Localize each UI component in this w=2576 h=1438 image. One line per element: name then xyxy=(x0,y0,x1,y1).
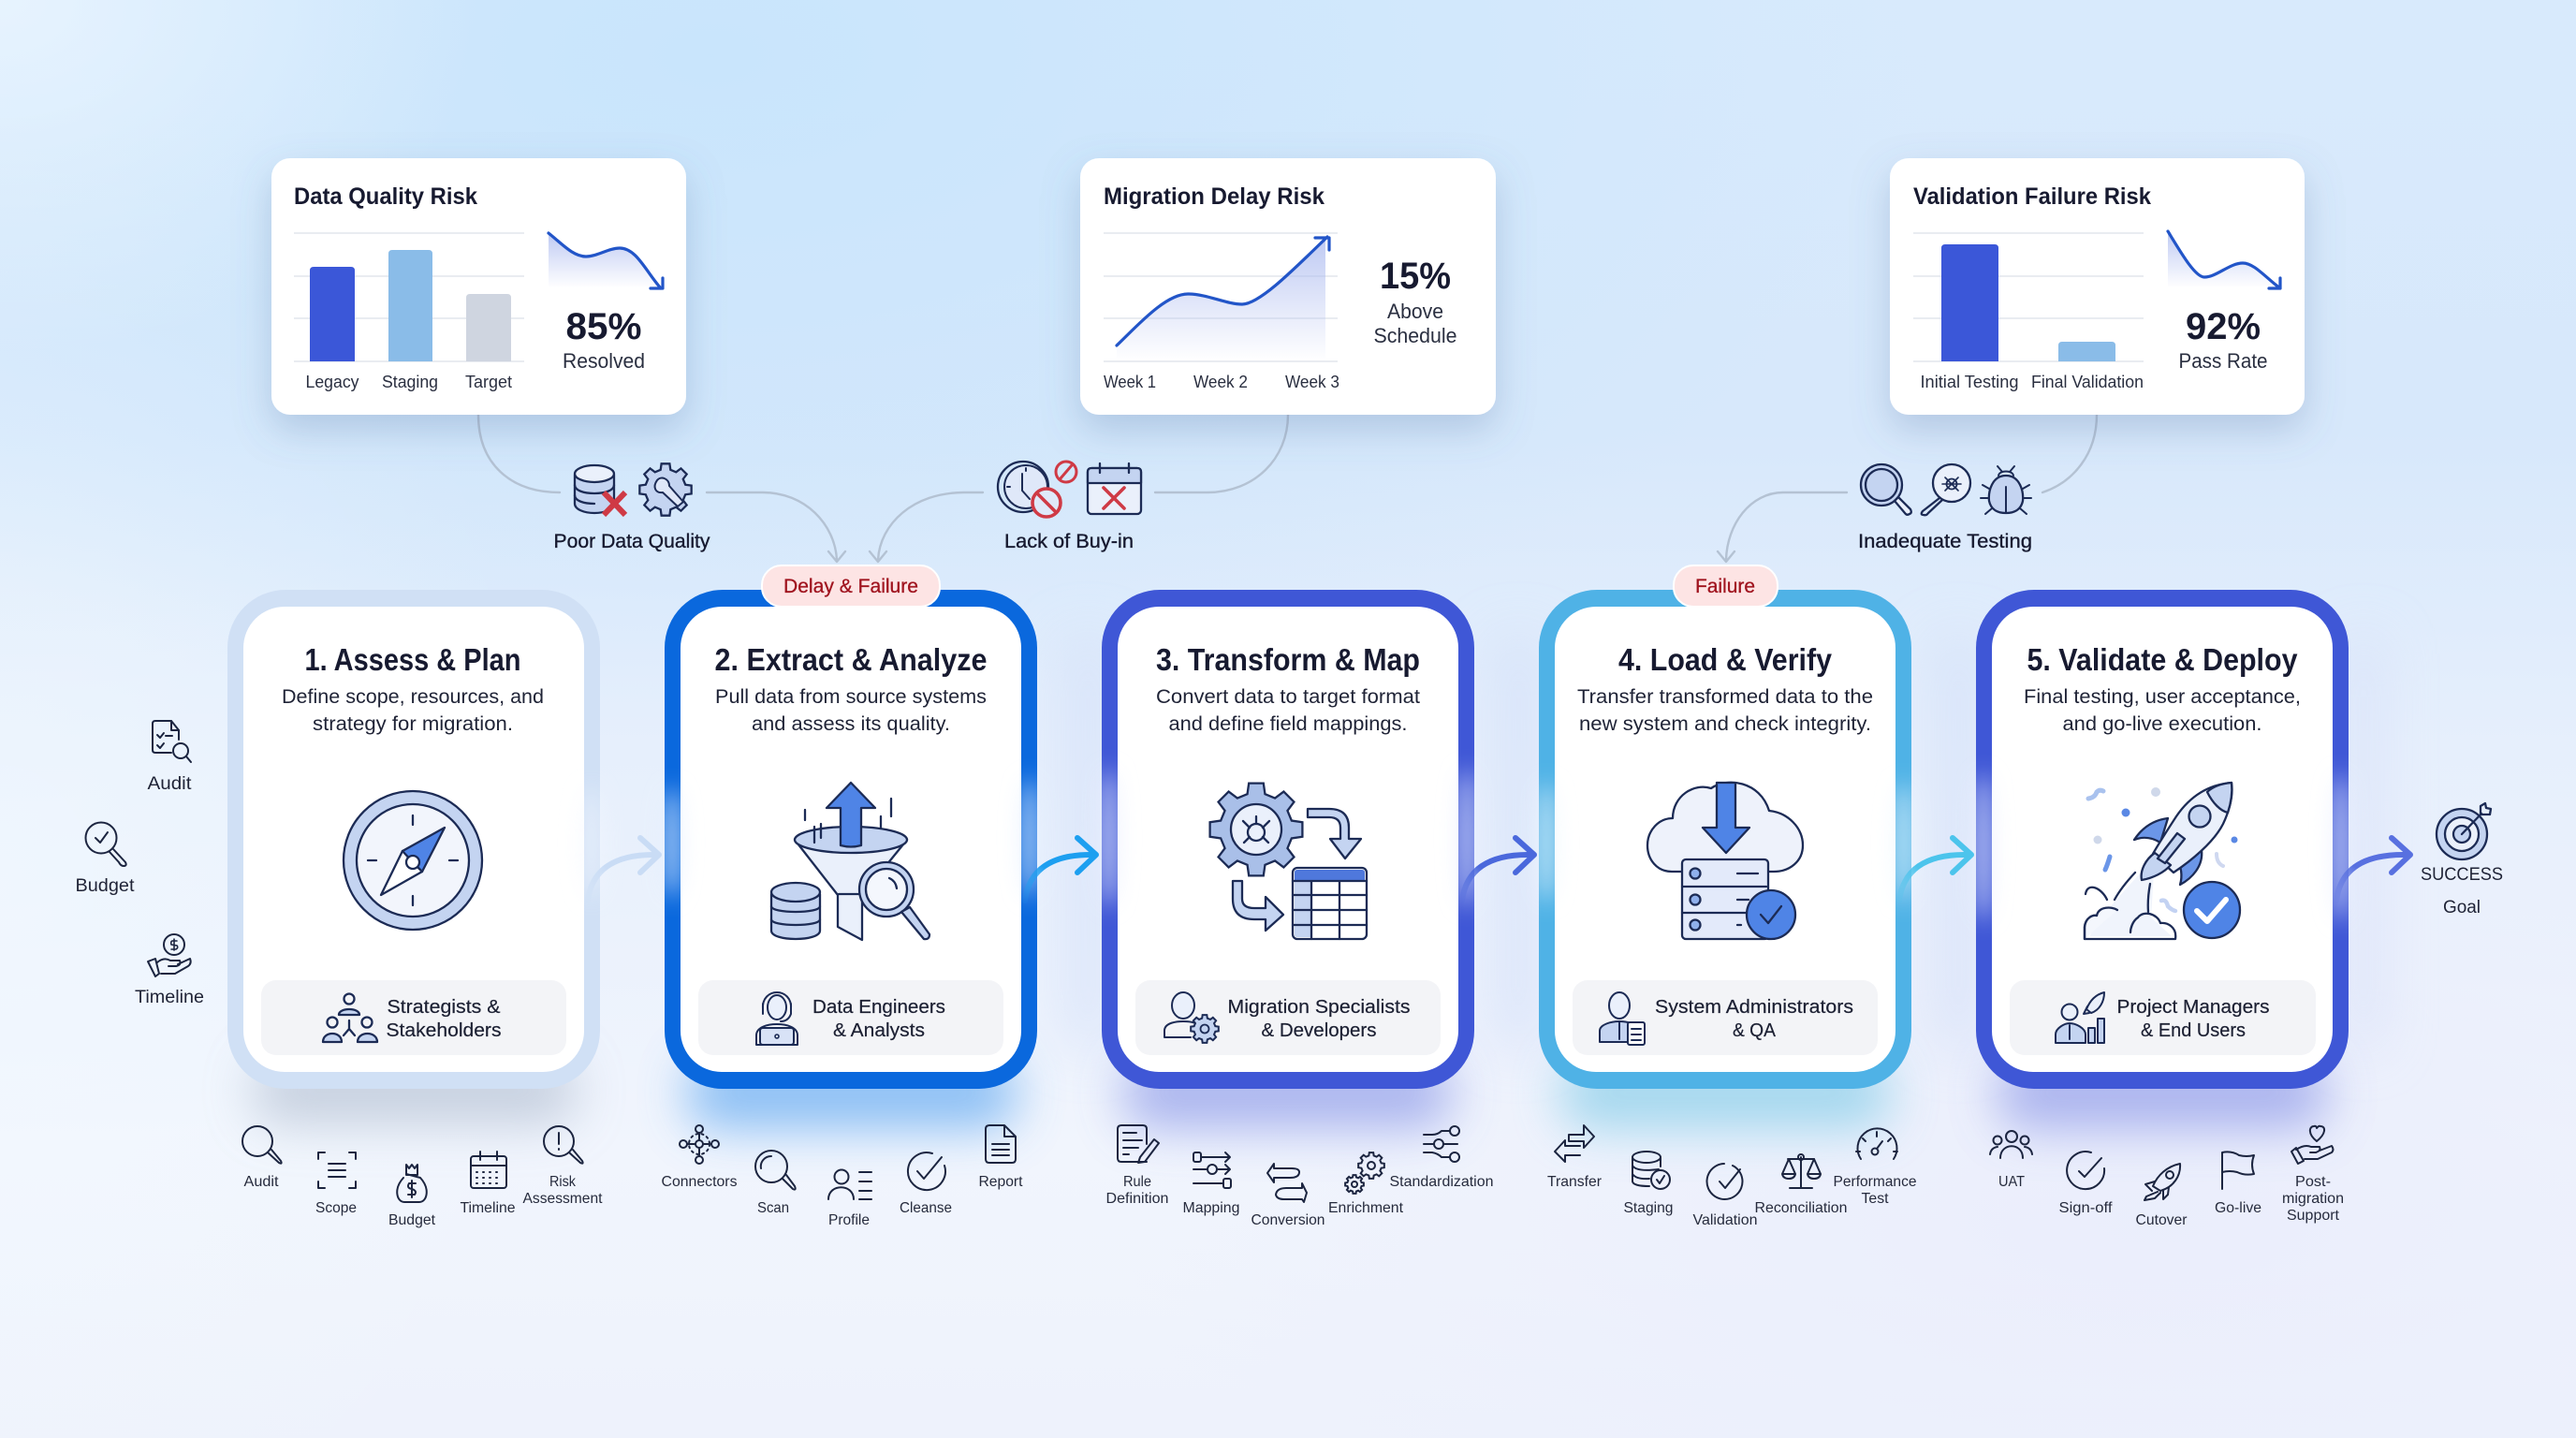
glow under step cards xyxy=(253,637,2382,1128)
task: post-migration support: Post- xyxy=(2295,1174,2331,1190)
metric: 92% pass rate: 92% xyxy=(2186,306,2261,347)
description: step 2: Pull data from source systems xyxy=(715,686,987,708)
role: data engineers and analysts: & Analysts xyxy=(833,1020,925,1041)
icon: funnel with data xyxy=(771,783,929,940)
icon: coin on hand xyxy=(148,934,191,976)
panel: step 4 load and verify xyxy=(1539,590,1911,1089)
role: system administrators and qa: System Administrators xyxy=(1655,997,1853,1018)
task: cutover: Cutover xyxy=(2136,1212,2188,1228)
label: lack of buy-in: Lack of Buy-in xyxy=(1004,531,1134,552)
task: reconciliation xyxy=(1754,1154,1848,1216)
description: step 3: and define field mappings. xyxy=(1168,713,1408,735)
description: step 4 xyxy=(1577,686,1873,735)
task: scope xyxy=(315,1152,357,1216)
task: mapping: Mapping xyxy=(1183,1200,1239,1216)
heading: step 4: 4. Load & Verify xyxy=(1618,642,1833,677)
bar chart: testing: Initial Testing xyxy=(1921,373,2018,391)
icon: specialist with gear xyxy=(1164,992,1219,1043)
bar chart: legacy staging target: Legacy xyxy=(305,373,359,391)
panel: validation failure risk xyxy=(1890,158,2305,415)
input: timeline xyxy=(135,934,204,1007)
line chart: weeks: Week 1 xyxy=(1104,373,1156,391)
task: budget: Budget xyxy=(388,1212,436,1228)
task: conversion xyxy=(1251,1164,1325,1228)
task: post-migration support xyxy=(2282,1126,2344,1224)
role: migration specialists and developers: & Developers xyxy=(1262,1020,1376,1041)
task: rule definition: Rule xyxy=(1123,1174,1151,1190)
icon: gear and table mapping xyxy=(1210,784,1367,939)
bar chart: legacy staging target: Target xyxy=(465,373,512,391)
description: step 1: strategy for migration. xyxy=(313,713,513,735)
task: connectors xyxy=(661,1125,738,1190)
task: risk assessment: Risk xyxy=(549,1174,577,1190)
heading: step 5: 5. Validate & Deploy xyxy=(2027,642,2298,677)
task: conversion: Conversion xyxy=(1251,1212,1325,1228)
description: step 3: Convert data to target format xyxy=(1156,686,1420,708)
arrow: step 3 to 4 xyxy=(1462,838,1534,901)
heading: validation failure risk: Validation Failure Risk xyxy=(1913,183,2151,210)
badge: delay and failure: Delay & Failure xyxy=(783,576,918,597)
heading: step 1: 1. Assess & Plan xyxy=(305,642,520,677)
task: staging: Staging xyxy=(1623,1200,1674,1216)
sparkline: falling trend xyxy=(549,233,663,288)
task: validation xyxy=(1692,1164,1758,1228)
icon: compass xyxy=(344,791,482,930)
arrow: step 2 to 3 xyxy=(1025,838,1096,901)
icon: database error xyxy=(575,465,625,515)
metric: 85% resolved: 85% xyxy=(565,306,642,347)
role: project managers and end users: Project Managers xyxy=(2117,997,2269,1018)
label: inadequate testing: Inadequate Testing xyxy=(1858,531,2032,552)
task: scan xyxy=(755,1151,796,1216)
metric: 85% resolved xyxy=(563,306,645,373)
task: cutover xyxy=(2136,1164,2188,1228)
task: enrichment: Enrichment xyxy=(1328,1200,1404,1216)
line chart: weeks: Week 3 xyxy=(1285,373,1339,391)
metric: 15% above schedule: Above xyxy=(1387,300,1443,323)
description: step 4: new system and check integrity. xyxy=(1579,713,1871,735)
description: step 5: and go-live execution. xyxy=(2063,713,2261,735)
task: post-migration support: migration xyxy=(2282,1191,2344,1207)
metric: 15% above schedule: 15% xyxy=(1380,256,1451,297)
task: reconciliation: Reconciliation xyxy=(1754,1200,1848,1216)
role: strategists and stakeholders: Stakeholders xyxy=(386,1020,502,1041)
task: performance test xyxy=(1833,1128,1917,1207)
badge: failure: Failure xyxy=(1695,576,1755,597)
panel: step 3 transform and map xyxy=(1102,590,1474,1089)
task: report xyxy=(979,1125,1023,1190)
task: cleanse xyxy=(900,1152,952,1216)
task: standardization xyxy=(1389,1126,1494,1190)
panel: step 5 validate and deploy xyxy=(1976,590,2349,1089)
input: audit xyxy=(148,721,192,794)
task row: step 4 xyxy=(1547,1125,1917,1228)
task: post-migration support: Support xyxy=(2287,1208,2340,1224)
task: enrichment xyxy=(1328,1152,1404,1216)
heading: step 3: 3. Transform & Map xyxy=(1156,642,1420,677)
task: timeline: Timeline xyxy=(461,1200,516,1216)
icon: calendar cancelled xyxy=(1088,463,1141,514)
panel: step 2 extract and analyze xyxy=(665,590,1037,1089)
role: strategists and stakeholders xyxy=(261,980,566,1055)
task: performance test: Performance xyxy=(1833,1174,1917,1190)
goal: success xyxy=(2421,803,2503,917)
task: transfer xyxy=(1547,1125,1603,1190)
heading: step 2: 2. Extract & Analyze xyxy=(715,642,987,677)
role: strategists and stakeholders: Strategists & xyxy=(388,997,501,1018)
connector: migration delay risk xyxy=(870,415,1288,562)
bar chart: testing xyxy=(1913,233,2144,391)
input: budget: Budget xyxy=(75,876,135,896)
role: system administrators and qa: & QA xyxy=(1733,1020,1777,1041)
task: standardization: Standardization xyxy=(1389,1174,1494,1190)
description: step 3 xyxy=(1156,686,1420,735)
task: rule definition: Definition xyxy=(1106,1191,1168,1207)
task: sign-off xyxy=(2059,1152,2113,1216)
description: step 2: and assess its quality. xyxy=(752,713,950,735)
metric: 85% resolved: Resolved xyxy=(563,349,645,373)
task: report: Report xyxy=(979,1174,1023,1190)
description: step 5: Final testing, user acceptance, xyxy=(2024,686,2301,708)
input: audit: Audit xyxy=(148,774,192,794)
role: migration specialists and developers: Migration Specialists xyxy=(1228,997,1410,1018)
task: risk assessment xyxy=(522,1126,603,1207)
description: step 1 xyxy=(282,686,544,735)
task: uat: UAT xyxy=(1998,1174,2025,1190)
task: go-live xyxy=(2215,1152,2261,1216)
role: data engineers and analysts xyxy=(698,980,1003,1055)
badge: delay and failure xyxy=(762,565,940,607)
light glow on card borders xyxy=(582,768,2349,922)
icon: magnifier xyxy=(1861,464,1911,515)
icon: org people xyxy=(323,994,377,1042)
metric: 92% pass rate: Pass Rate xyxy=(2179,349,2267,373)
arrow: step 5 to goal xyxy=(2336,838,2410,901)
goal: success: Goal xyxy=(2443,898,2481,917)
task: uat xyxy=(1990,1131,2032,1190)
description: step 5 xyxy=(2024,686,2301,735)
task: rule definition xyxy=(1106,1125,1168,1207)
metric: 15% above schedule: Schedule xyxy=(1374,324,1456,347)
task: performance test: Test xyxy=(1861,1191,1889,1207)
task: profile: Profile xyxy=(828,1212,870,1228)
icon: cloud load to server xyxy=(1647,783,1803,939)
task: mapping xyxy=(1183,1152,1239,1216)
icon: engineer headset xyxy=(756,992,798,1045)
task: cleanse: Cleanse xyxy=(900,1200,952,1216)
input: budget xyxy=(75,822,135,896)
description: step 4: Transfer transformed data to the xyxy=(1577,686,1873,708)
icon: bug xyxy=(1981,466,2031,514)
icon: target xyxy=(2437,803,2491,859)
panel: migration delay risk xyxy=(1080,158,1496,415)
task row: step 1 xyxy=(242,1126,603,1228)
task: sign-off: Sign-off xyxy=(2059,1200,2113,1216)
task: risk assessment: Assessment xyxy=(522,1191,603,1207)
metric: 15% above schedule xyxy=(1374,256,1456,347)
role: system administrators and qa xyxy=(1573,980,1878,1055)
cause: inadequate testing xyxy=(1858,464,2032,552)
task: scan: Scan xyxy=(757,1200,789,1216)
icon: manager with rocket and bars xyxy=(2056,992,2104,1043)
task row: step 5 xyxy=(1990,1126,2344,1228)
task: transfer: Transfer xyxy=(1547,1174,1603,1190)
task row: step 3 xyxy=(1106,1125,1494,1228)
task: audit: Audit xyxy=(243,1174,279,1190)
panel: data quality risk xyxy=(271,158,686,415)
input: timeline: Timeline xyxy=(135,988,204,1007)
task: validation: Validation xyxy=(1692,1212,1758,1228)
sparkline: falling trend xyxy=(2168,231,2280,288)
icon: clock blocked xyxy=(998,462,1076,517)
icon: gear wrench xyxy=(639,463,692,516)
line chart: weeks xyxy=(1104,233,1339,391)
badge: failure xyxy=(1674,565,1778,607)
task: timeline xyxy=(461,1152,516,1216)
role: migration specialists and developers xyxy=(1135,980,1441,1055)
connector: validation failure risk xyxy=(1718,415,2097,562)
task row: step 2 xyxy=(661,1125,1023,1228)
panel: step 1 assess and plan xyxy=(227,590,600,1089)
role: data engineers and analysts: Data Engineers xyxy=(812,997,945,1018)
icon: budget check magnifier xyxy=(86,822,126,866)
role: project managers and end users xyxy=(2010,980,2316,1055)
heading: migration delay risk: Migration Delay Risk xyxy=(1104,183,1325,210)
task: go-live: Go-live xyxy=(2215,1200,2261,1216)
cause: poor data quality xyxy=(554,463,710,552)
metric: 92% pass rate xyxy=(2179,306,2267,373)
task: budget xyxy=(388,1165,436,1228)
role: project managers and end users: & End Users xyxy=(2141,1020,2246,1041)
task: staging xyxy=(1623,1152,1674,1216)
icon: admin with checklist xyxy=(1600,992,1645,1045)
task: profile xyxy=(828,1170,871,1228)
label: poor data quality: Poor Data Quality xyxy=(554,531,710,552)
description: step 1: Define scope, resources, and xyxy=(282,686,544,708)
description: step 2 xyxy=(715,686,987,735)
task: scope: Scope xyxy=(315,1200,357,1216)
icon: audit document xyxy=(153,721,191,762)
task: audit xyxy=(242,1126,282,1190)
heading: data quality risk: Data Quality Risk xyxy=(294,183,477,210)
icon: rocket launch xyxy=(2085,783,2240,939)
goal: success: SUCCESS xyxy=(2421,865,2503,885)
task: connectors: Connectors xyxy=(661,1174,738,1190)
bar chart: legacy staging target xyxy=(294,233,524,391)
arrow: step 1 to 2 xyxy=(588,838,659,901)
bar chart: legacy staging target: Staging xyxy=(382,373,438,391)
cause: lack of buy-in xyxy=(998,462,1141,552)
line chart: weeks: Week 2 xyxy=(1193,373,1248,391)
icon: bug magnifier xyxy=(1922,464,1970,515)
arrow: step 4 to 5 xyxy=(1899,838,1971,901)
bar chart: testing: Final Validation xyxy=(2031,373,2144,391)
connector: data quality risk xyxy=(478,415,845,562)
